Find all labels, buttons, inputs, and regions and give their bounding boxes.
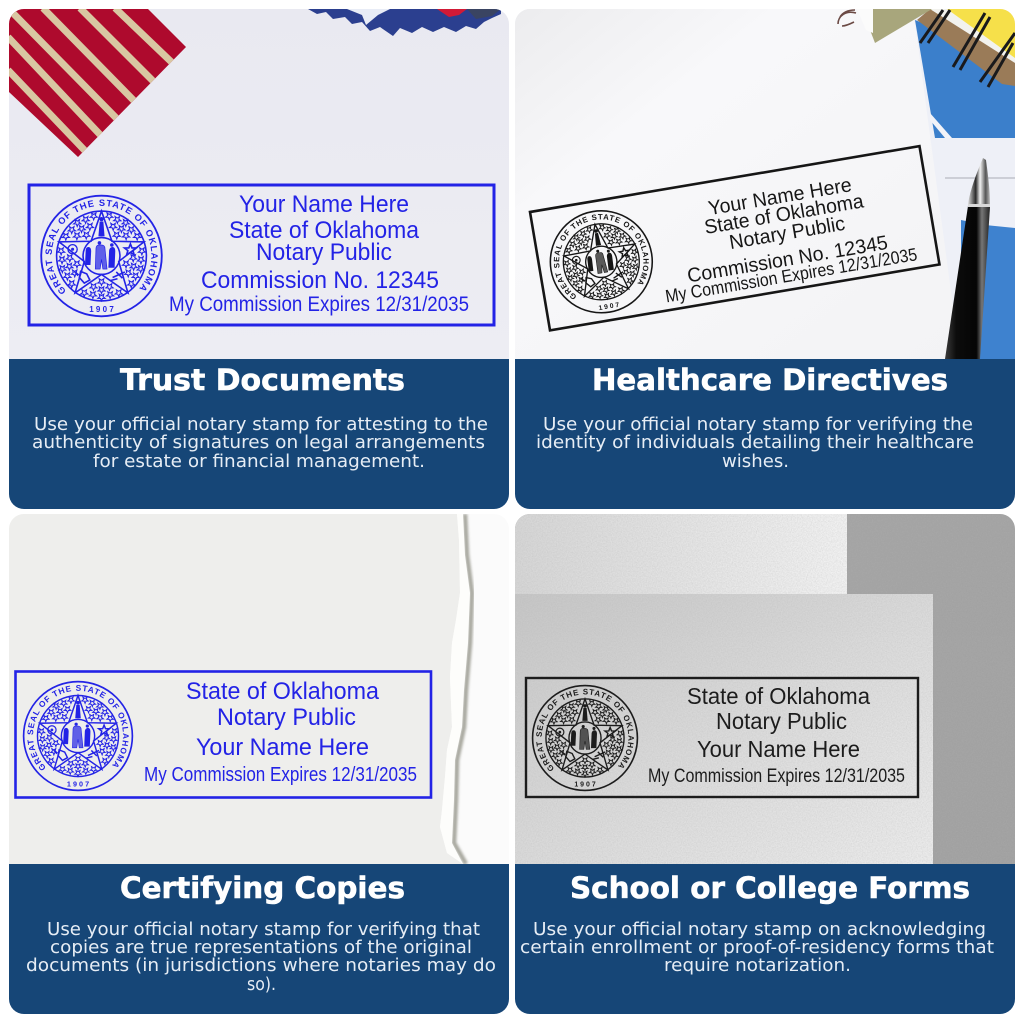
photo: torn paper <box>9 514 474 864</box>
photo: textured paper sheets <box>515 514 1015 864</box>
stamp text: Commission No. 12345 <box>686 232 889 287</box>
panel: Certifying Copies <box>9 514 509 1014</box>
stamp text <box>169 191 469 316</box>
torn white fibre strip <box>452 514 470 864</box>
stamp text: Notary Public <box>256 239 392 266</box>
stamp text: My Commission Expires 12/31/2035 <box>664 244 919 306</box>
icon: notebooks <box>838 9 1015 87</box>
icon: state seal: 1907 <box>598 302 620 312</box>
body text: for estate or financial management. <box>93 452 425 472</box>
torn paper edge shadow <box>454 514 472 864</box>
panel: Healthcare Directives <box>515 9 1015 509</box>
body text: require notarization. <box>664 956 851 976</box>
stamp text: Notary Public <box>217 704 356 731</box>
body text <box>32 415 488 472</box>
stamp: blue impression <box>28 184 496 326</box>
heading: Trust Documents <box>120 363 405 397</box>
stamp text: State of Oklahoma <box>229 217 420 244</box>
blue folder <box>915 20 1015 138</box>
body text: identity of individuals detailing their healthcare <box>536 433 974 453</box>
icon: state seal: 1907 <box>574 782 596 789</box>
stamp text <box>648 683 905 787</box>
caption band <box>9 864 509 1014</box>
body text: Use your official notary stamp on acknowledging <box>533 920 986 940</box>
body text: wishes. <box>722 452 789 472</box>
stamp text: Your Name Here <box>239 191 409 218</box>
icon: state seal: GREAT SEAL OF THE STATE OF OKLAHOMA <box>45 200 158 294</box>
panel: School or College Forms <box>515 514 1015 1014</box>
stamp text: My Commission Expires 12/31/2035 <box>169 293 469 316</box>
photo: desk with paper, notebook and pen <box>515 9 1015 359</box>
stamp text <box>666 181 917 304</box>
stamp text: My Commission Expires 12/31/2035 <box>144 764 417 786</box>
white sheet <box>515 9 960 359</box>
stamp: black impression, angled <box>528 144 941 332</box>
body text: Use your official notary stamp for attesting to the <box>34 415 488 435</box>
stamp: black impression <box>524 676 920 798</box>
body text: authenticity of signatures on legal arrangements <box>32 433 485 453</box>
icon: state seal: 1907 <box>89 305 114 314</box>
icon: blue bunting <box>308 9 501 36</box>
caption band <box>9 359 509 509</box>
heading: School or College Forms <box>570 871 970 905</box>
stamp text: Your Name Here <box>196 734 369 761</box>
body text: certain enrollment or proof-of-residency forms that <box>520 938 994 958</box>
caption band <box>515 359 1015 509</box>
icon: pen <box>945 158 990 359</box>
photo: paper with flag fabric <box>9 9 509 359</box>
icon: striped flag fabric <box>9 9 186 157</box>
stamp: blue impression <box>14 670 432 799</box>
stamp text: State of Oklahoma <box>186 678 380 705</box>
body text <box>520 920 994 976</box>
stamp text: State of Oklahoma <box>703 190 866 239</box>
stamp text: Commission No. 12345 <box>201 267 439 294</box>
stamp text: Notary Public <box>728 213 847 254</box>
body text <box>538 416 973 468</box>
body text: so). <box>247 975 276 995</box>
stamp text: Your Name Here <box>707 174 853 220</box>
icon: state seal: GREAT SEAL OF THE STATE OF OKLAHOMA <box>27 685 129 770</box>
stamp text <box>144 678 417 786</box>
panel: Trust Documents <box>9 9 509 509</box>
stamp text: Notary Public <box>716 708 847 734</box>
stamp text: State of Oklahoma <box>687 683 870 709</box>
body text: documents (in jurisdictions where notaries may do <box>26 956 496 976</box>
caption band <box>515 864 1015 1014</box>
icon: state seal: GREAT SEAL OF THE STATE OF OKLAHOMA <box>536 688 634 771</box>
body text: Use your official notary stamp for verifying that <box>47 920 480 940</box>
stamp text: Your Name Here <box>697 736 860 762</box>
body text: copies are true representations of the original <box>50 938 472 958</box>
stamp text: My Commission Expires 12/31/2035 <box>648 766 905 787</box>
body text <box>26 920 496 995</box>
icon: state seal: GREAT SEAL OF THE STATE OF OKLAHOMA <box>554 214 649 300</box>
icon: state seal: 1907 <box>67 780 89 789</box>
body text: Use your official notary stamp for verifying the <box>543 415 973 435</box>
heading: Certifying Copies <box>120 871 405 905</box>
heading: Healthcare Directives <box>592 363 948 397</box>
